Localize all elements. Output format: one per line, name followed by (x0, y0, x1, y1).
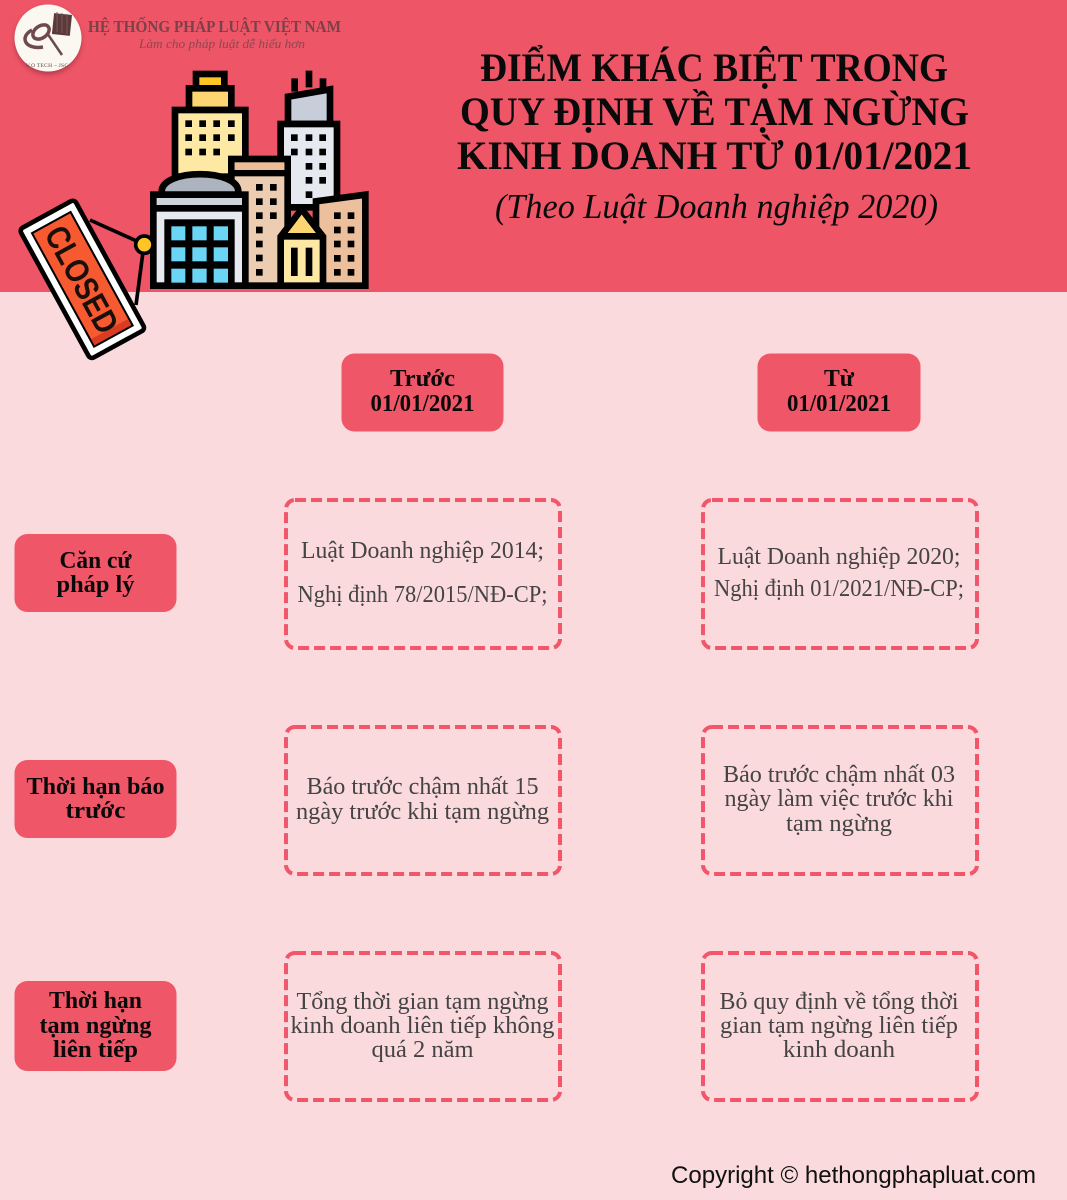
column header: from (758, 354, 920, 432)
title: QUY ĐỊNH VỀ TẠM NGỪNG (460, 89, 969, 134)
cell: duration before: quá 2 năm (372, 1036, 474, 1063)
row label: consecutive suspension: tạm ngừng (40, 1013, 152, 1039)
cell: notice from (703, 727, 977, 874)
title: KINH DOANH TỪ 01/01/2021 (457, 133, 972, 178)
row label: legal basis: Căn cứ (60, 548, 132, 574)
cell: legal basis before: Luật Doanh nghiệp 2014; (301, 537, 544, 564)
cell: notice before: Báo trước chậm nhất 15 (306, 773, 538, 800)
cell: duration from (703, 953, 977, 1100)
icon: closed sign: CLOSED (37, 220, 125, 340)
column header: from: Từ (824, 366, 855, 392)
column header: before: 01/01/2021 (370, 391, 474, 417)
row label: consecutive suspension: Thời hạn (49, 988, 142, 1014)
row label: notice period: trước (66, 798, 126, 824)
row label: notice period: Thời hạn báo (26, 774, 164, 800)
cell: duration before (286, 953, 560, 1100)
icon: small house (281, 209, 323, 286)
title: ĐIỂM KHÁC BIỆT TRONG (480, 44, 948, 90)
logo badge (14, 4, 82, 74)
icon: city buildings (19, 71, 365, 359)
row label: consecutive suspension: liên tiếp (53, 1037, 138, 1063)
icon: closed sign (19, 199, 153, 359)
logo wordmark: HỆ THỐNG PHÁP LUẬT VIỆT NAM (88, 16, 341, 36)
icon: yellow tower (175, 74, 245, 177)
copyright: Copyright © hethongphapluat.com (671, 1162, 1036, 1189)
column header: from: 01/01/2021 (787, 391, 891, 417)
cell: legal basis from: Luật Doanh nghiệp 2020; (718, 543, 960, 570)
header band (0, 0, 1067, 292)
icon: domed building (153, 174, 245, 286)
cell: legal basis before: Nghị định 78/2015/NĐ-CP; (298, 581, 548, 608)
logo wordmark (88, 16, 341, 51)
logo wordmark: Làm cho pháp luật dễ hiểu hơn (138, 37, 305, 51)
title (457, 44, 972, 178)
row label: legal basis: pháp lý (56, 572, 134, 598)
row label: consecutive suspension (14, 981, 176, 1071)
cell: legal basis before (286, 500, 560, 648)
cell: notice before: ngày trước khi tạm ngừng (296, 798, 549, 825)
cell: notice from: ngày làm việc trước khi (724, 785, 954, 812)
cell: notice before (286, 727, 560, 874)
cell: duration before: kinh doanh liên tiếp không (290, 1012, 554, 1039)
icon: beige building (231, 159, 288, 286)
cell: notice from: Báo trước chậm nhất 03 (723, 761, 955, 788)
logo badge: V.O TECH – JSC (26, 63, 68, 69)
cell: legal basis from: Nghị định 01/2021/NĐ-CP; (714, 575, 964, 602)
icon: grey tower (281, 71, 337, 207)
column header: before (342, 354, 504, 432)
cell: legal basis from (703, 500, 977, 648)
cell: duration from: kinh doanh (783, 1036, 895, 1063)
cell: duration from: gian tạm ngừng liên tiếp (720, 1012, 958, 1039)
icon: right building (316, 195, 365, 286)
row label: legal basis (14, 534, 176, 612)
row label: notice period (14, 760, 176, 838)
cell: duration from: Bỏ quy định về tổng thời (720, 988, 959, 1015)
cell: notice from: tạm ngừng (786, 810, 892, 837)
subtitle: (Theo Luật Doanh nghiệp 2020) (495, 188, 938, 226)
column header: before: Trước (390, 366, 455, 392)
cell: duration before: Tổng thời gian tạm ngừng (296, 988, 548, 1015)
